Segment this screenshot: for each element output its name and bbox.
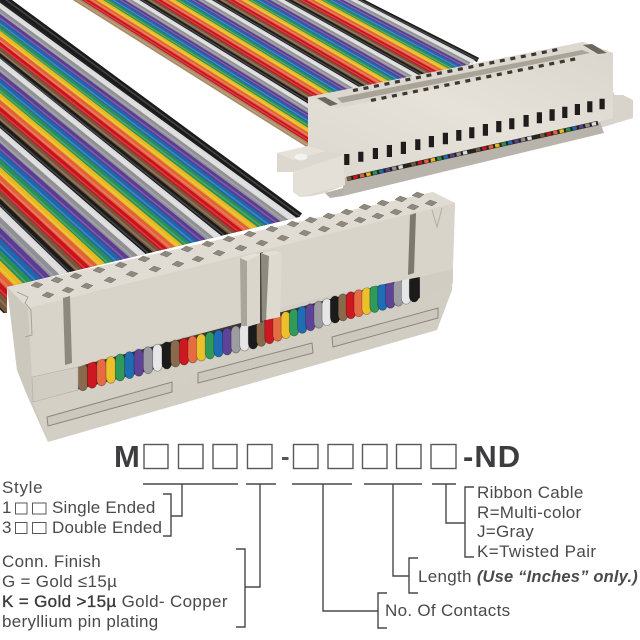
text block: ribbon cable: K=Twisted Pair xyxy=(477,542,596,561)
divider gap xyxy=(260,252,263,323)
front slots xyxy=(344,99,605,165)
text block: connector finish: K = Gold >15µ Gold- Copper xyxy=(2,592,228,611)
pin holes xyxy=(353,49,577,100)
connector body xyxy=(7,192,455,442)
leader: contacts xyxy=(323,484,387,628)
text block: connector finish: beryllium pin plating xyxy=(2,612,159,631)
leader: style xyxy=(163,484,182,536)
text block: ribbon cable: Ribbon Cable xyxy=(477,483,584,502)
under strip xyxy=(343,122,604,196)
text block: connector finish: G = Gold ≤15µ xyxy=(2,572,117,591)
text block: style: 1 xyxy=(2,498,12,517)
back ribbon cable xyxy=(69,0,478,146)
back connector xyxy=(277,42,633,198)
dash xyxy=(282,457,288,460)
wire ends xyxy=(347,123,598,179)
underlines and leader lines xyxy=(143,484,474,628)
text block: connector finish xyxy=(2,552,228,631)
code boxes xyxy=(144,444,456,468)
text block: length: Length (Use “Inches” only.) xyxy=(418,567,638,586)
recessed panel: right xyxy=(332,308,438,347)
V mark xyxy=(432,208,442,227)
leader: length xyxy=(393,484,418,593)
leader: ribbon xyxy=(446,484,474,557)
text block: style xyxy=(2,478,162,537)
right locking strip xyxy=(420,269,453,302)
leader: connector finish xyxy=(236,484,260,627)
text block: ribbon cable: J=Gray xyxy=(477,522,534,541)
text block: ribbon cable: R=Multi-color xyxy=(477,503,582,522)
text block: style: 3 xyxy=(2,518,12,537)
text block: connector finish: Conn. Finish xyxy=(2,552,101,571)
recessed panel: left xyxy=(47,382,172,426)
top face xyxy=(7,192,455,308)
wire cavity xyxy=(76,275,420,390)
end markers xyxy=(317,44,607,106)
right divider tab xyxy=(261,251,282,321)
upper cover xyxy=(28,203,455,377)
prefix M: M xyxy=(114,439,140,474)
connector body xyxy=(308,42,613,178)
text block: ribbon cable xyxy=(477,483,596,561)
front ribbon cable xyxy=(0,0,302,313)
corner latch detail xyxy=(17,292,32,337)
connector top face xyxy=(308,42,613,108)
suffix ND: -ND xyxy=(463,439,521,474)
left divider tab xyxy=(240,253,260,327)
front connector xyxy=(7,192,455,442)
text block: contacts: No. Of Contacts xyxy=(385,601,510,620)
centre channel xyxy=(337,50,590,103)
text block: style: Style xyxy=(2,478,43,497)
recessed panel: middle xyxy=(198,343,313,383)
left side face xyxy=(7,287,48,442)
text block: style: Double Ended xyxy=(52,518,162,537)
socket holes xyxy=(31,192,424,288)
wire coils xyxy=(78,275,419,391)
part number code xyxy=(114,439,521,474)
left locking strip xyxy=(32,367,78,402)
left slit xyxy=(63,296,72,365)
right mounting flange xyxy=(600,90,633,128)
right slit xyxy=(408,213,416,275)
left mounting flange xyxy=(277,146,345,198)
text block: style: Single Ended xyxy=(52,498,156,517)
